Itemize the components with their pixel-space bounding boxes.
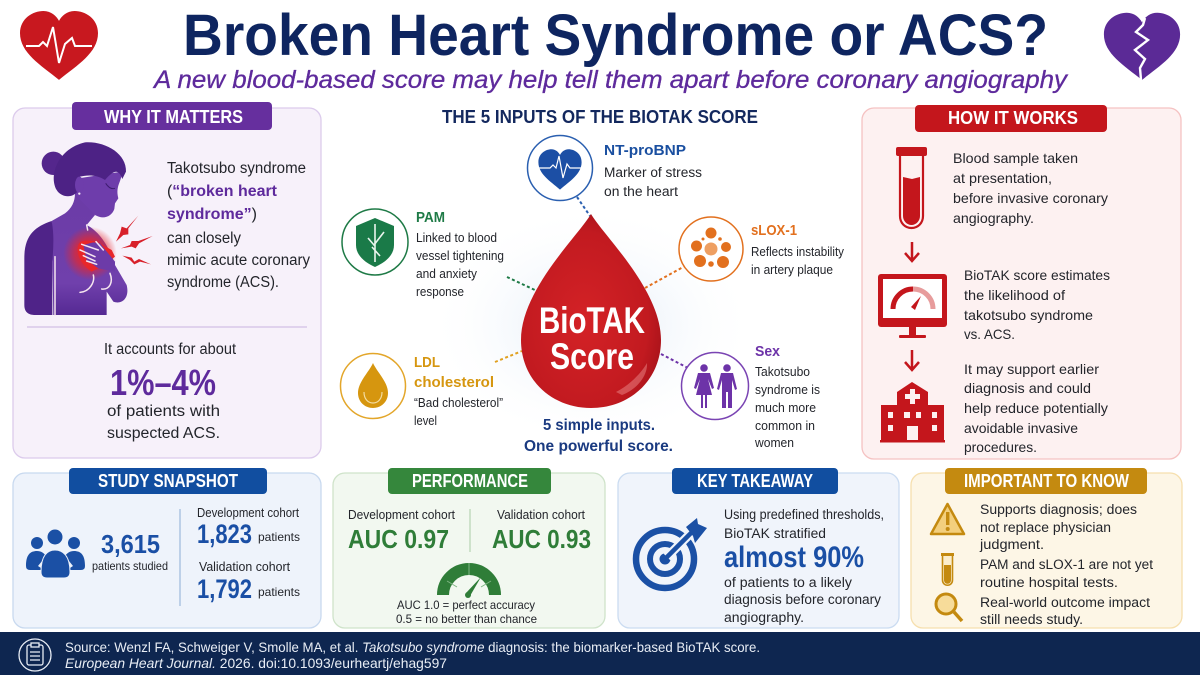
text: takotsubo description: mimic acute coronary (167, 252, 310, 269)
text: takeaway message (724, 507, 884, 625)
text: takotsubo description: Takotsubo syndrome (167, 160, 306, 177)
stat: validation AUC: AUC 0.93 (492, 524, 591, 554)
stat: development cohort: Development cohort (197, 506, 299, 520)
arrow: step 2 to 3 (905, 350, 919, 370)
text: takeaway message: Using predefined thresholds, (724, 507, 884, 522)
stat: development AUC: AUC 0.97 (348, 524, 449, 554)
text: how it works steps: It may support earlier (964, 361, 1099, 377)
text: how it works steps (953, 150, 1110, 455)
heading: why it matters: WHY IT MATTERS (104, 107, 243, 127)
text: takeaway message: almost 90% (724, 541, 864, 574)
heading: performance (388, 468, 551, 494)
heading: performance: PERFORMANCE (412, 471, 528, 491)
icon: woman clutching chest (24, 142, 153, 315)
icon: red heart with ECG line (20, 11, 98, 80)
input: LDL cholesterol: LDL (414, 354, 440, 371)
text: caveats (979, 502, 1153, 627)
heading: important to know (945, 468, 1147, 494)
text: caveats: judgment. (979, 537, 1044, 552)
stat: development AUC (348, 508, 455, 554)
panel: the 5 inputs of the BioTAK score (340, 107, 845, 455)
stat: 1%-4% of patients: It accounts for about (104, 341, 237, 358)
text: caveats: still needs study. (980, 612, 1083, 627)
panel: performance (333, 468, 605, 628)
arrow: step 1 to 2 (905, 242, 919, 261)
title: Broken Heart Syndrome or ACS? (183, 3, 1048, 68)
stat: validation cohort (197, 560, 300, 604)
text: takeaway message: diagnosis before coronary (724, 592, 881, 607)
text: takotsubo description (167, 160, 310, 291)
input: sLOX-1: sLOX-1 (751, 222, 797, 239)
stat: total patients: 3,615 (101, 529, 160, 559)
input: PAM: vessel tightening (416, 249, 504, 263)
text: how it works steps: Blood sample taken (953, 150, 1078, 166)
input: sLOX-1 (679, 217, 845, 281)
stat: validation AUC: Validation cohort (497, 508, 586, 522)
text: how it works steps: help reduce potentially (964, 400, 1108, 416)
text: citation: Source: Wenzl FA, Schweiger V, Smolle MA, et al. Takotsubo syndrome diagnosis: the biomarker-based BioTAK score. (65, 639, 760, 655)
stat: 1%-4% of patients (104, 341, 237, 442)
stat: 1%-4% of patients: suspected ACS. (107, 425, 220, 442)
subtitle: A new blood-based score may help tell them apart before coronary angiography (152, 66, 1069, 94)
icon: test tube (941, 553, 954, 585)
stat: 1%-4% of patients: of patients with (107, 403, 220, 420)
stat: development cohort: 1,823 (197, 519, 252, 549)
text: takeaway message: of patients to a likely (724, 575, 852, 590)
input: LDL cholesterol: “Bad cholesterol” (414, 396, 503, 410)
input: PAM: PAM (416, 209, 445, 226)
text: how it works steps: the likelihood of (964, 287, 1065, 303)
icon: broken purple heart (1104, 13, 1180, 80)
heading: how it works: HOW IT WORKS (948, 108, 1078, 128)
text: how it works steps: avoidable invasive (964, 420, 1078, 436)
input: Sex (682, 343, 820, 450)
input: NT-proBNP: NT-proBNP (604, 142, 686, 159)
panel: key takeaway (618, 468, 899, 628)
input: Sex: women (754, 436, 794, 450)
panel: how it works (862, 105, 1181, 459)
heading: how it works (915, 105, 1107, 132)
text: how it works steps: diagnosis and could (964, 380, 1091, 396)
icon: warning triangle (931, 504, 964, 534)
text: citation: European Heart Journal. 2026. doi:10.1093/eurheartj/ehag597 (65, 655, 447, 671)
text: takeaway message: angiography. (724, 610, 804, 625)
input: PAM (342, 209, 504, 299)
heading: study snapshot: STUDY SNAPSHOT (98, 471, 238, 491)
central blood drop: BioTAK (539, 300, 645, 341)
text: caveats: Supports diagnosis; does (980, 502, 1137, 517)
input: PAM: response (416, 285, 464, 299)
input: Sex: common in (755, 419, 815, 433)
panel: study snapshot (13, 468, 321, 628)
icon: blood tube (896, 147, 927, 228)
footer: source citation (0, 632, 1200, 675)
heading: why it matters (72, 102, 272, 130)
input: NT-proBNP: on the heart (604, 184, 678, 199)
heading: study snapshot (69, 468, 267, 494)
dashed connectors (495, 197, 688, 368)
central blood drop (521, 214, 661, 408)
heading: key takeaway (672, 468, 838, 494)
central blood drop: Score (550, 336, 634, 377)
input: Sex: Sex (755, 343, 781, 360)
text: citation (65, 639, 760, 671)
input: Sex: Takotsubo (755, 365, 810, 379)
stat: development cohort: patients (258, 530, 300, 544)
input: NT-proBNP (528, 136, 702, 200)
text: how it works steps: at presentation, (953, 170, 1052, 186)
stat: validation AUC (492, 508, 591, 554)
text: caveats: not replace physician (980, 520, 1111, 535)
text: caveats: Real-world outcome impact (980, 595, 1150, 610)
input: LDL cholesterol (340, 354, 503, 428)
input: PAM: Linked to blood (416, 231, 497, 245)
heading: key takeaway: KEY TAKEAWAY (697, 471, 813, 491)
tagline: One powerful score. (524, 438, 673, 455)
input: NT-proBNP: Marker of stress (604, 165, 702, 180)
icon: monitor with gauge (878, 274, 947, 338)
text: caveats: routine hospital tests. (980, 575, 1118, 590)
heading: important to know: IMPORTANT TO KNOW (964, 471, 1129, 491)
text: how it works steps: vs. ACS. (964, 326, 1015, 342)
icon: hospital (880, 382, 945, 442)
stat: validation cohort: patients (258, 585, 300, 599)
input: PAM: and anxiety (416, 267, 478, 281)
stat: 1%-4% of patients: 1%–4% (110, 362, 216, 403)
input: LDL cholesterol: level (414, 414, 437, 428)
text: AUC explanation: 0.5 = no better than chance (396, 612, 537, 626)
stat: total patients: patients studied (92, 559, 168, 573)
text: AUC explanation: AUC 1.0 = perfect accuracy (397, 598, 535, 612)
icon: magnifying glass (936, 594, 962, 621)
text: how it works steps: BioTAK score estimates (964, 267, 1110, 283)
input: Sex: syndrome is (755, 383, 820, 397)
text: how it works steps: before invasive coronary (953, 190, 1108, 206)
stat: validation cohort: 1,792 (197, 574, 252, 604)
stat: development cohort (197, 506, 300, 549)
text: takotsubo description: (“broken heart (167, 183, 277, 200)
text: how it works steps: angiography. (953, 210, 1034, 226)
stat: total patients (92, 529, 168, 573)
panel: important to know (911, 468, 1182, 628)
input: sLOX-1: in artery plaque (751, 263, 833, 277)
tagline: 5 simple inputs. (543, 417, 655, 434)
text: how it works steps: takotsubo syndrome (964, 307, 1093, 323)
text: caveats: PAM and sLOX-1 are not yet (980, 557, 1153, 572)
icon: target with arrow (636, 518, 707, 588)
text: AUC explanation (396, 598, 537, 626)
input: Sex: much more (755, 401, 816, 415)
text: how it works steps: procedures. (964, 439, 1037, 455)
tagline (524, 417, 673, 455)
chart: AUC gauge (443, 563, 495, 598)
icon: document (19, 639, 51, 671)
text: takeaway message: BioTAK stratified (724, 526, 826, 541)
text: takotsubo description: can closely (167, 230, 241, 247)
stat: validation cohort: Validation cohort (199, 560, 291, 574)
stat: development AUC: Development cohort (348, 508, 455, 522)
input: sLOX-1: Reflects instability (751, 245, 845, 259)
text: takotsubo description: syndrome (ACS). (167, 274, 279, 291)
input: LDL cholesterol: cholesterol (414, 374, 494, 391)
icon: group of patients (26, 530, 85, 578)
text: takotsubo description: syndrome”) (167, 206, 257, 223)
panel: why it matters (13, 102, 321, 458)
heading: 5 inputs: THE 5 INPUTS OF THE BIOTAK SCORE (442, 107, 758, 127)
